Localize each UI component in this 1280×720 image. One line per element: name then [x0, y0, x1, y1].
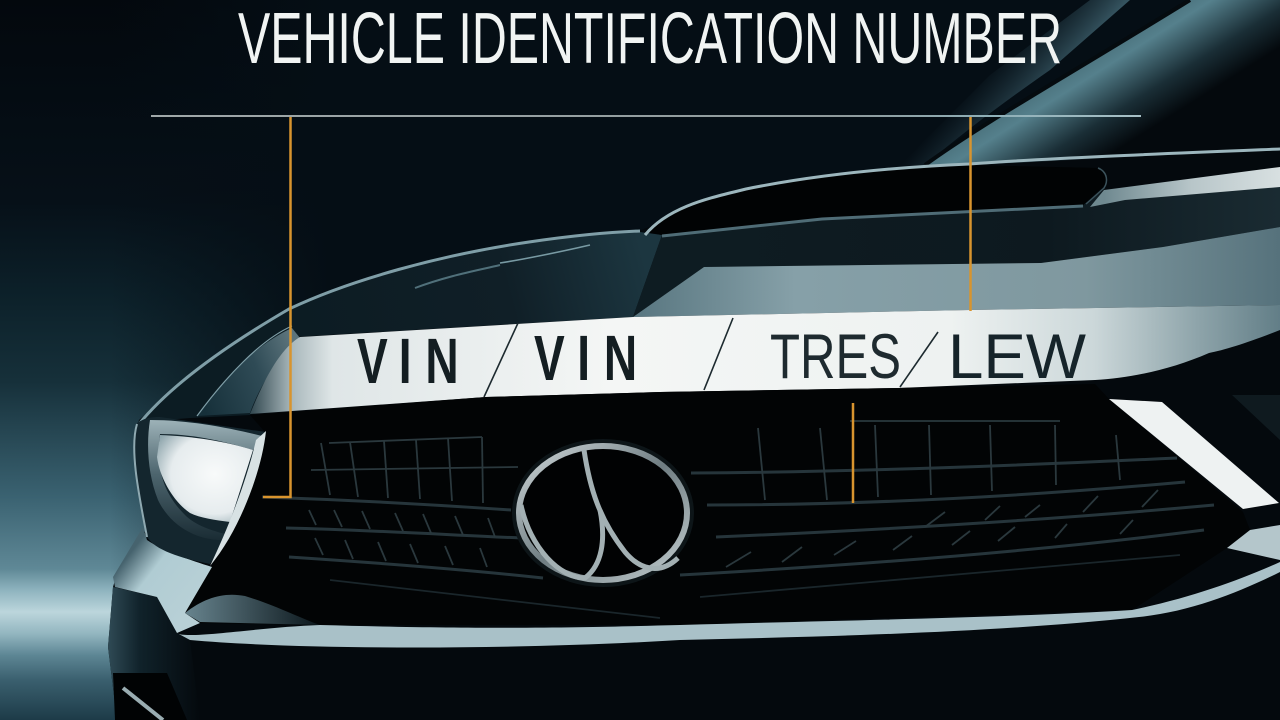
grille — [185, 384, 1250, 625]
headlight — [134, 417, 266, 566]
band label: VIN 1: VIN — [357, 326, 459, 397]
lower cheek and chrome bumper line — [113, 525, 1280, 720]
grille fine bars — [309, 421, 1180, 618]
hood highlights — [139, 231, 640, 424]
dark hood section — [633, 187, 1280, 317]
horizontal rule — [151, 115, 1141, 117]
upper hood stripe — [1090, 167, 1280, 207]
band label: TRES: TRES — [770, 322, 901, 392]
lower air vent — [113, 673, 187, 720]
right bumper highlight — [1227, 525, 1280, 560]
logo emblem — [515, 442, 691, 584]
lower left body shading — [108, 587, 200, 720]
band dividers — [484, 318, 938, 397]
grey hood panel — [633, 227, 1280, 317]
car body — [108, 150, 1280, 720]
grille main bars — [262, 458, 1214, 578]
hood scoop — [645, 149, 1280, 236]
shoulder panel — [197, 328, 300, 416]
lower lip — [185, 595, 320, 625]
right daytime light — [1109, 395, 1280, 509]
band label: VIN 2: VIN — [534, 323, 637, 394]
band label: LEW: LEW — [948, 322, 1087, 392]
white VIN band — [250, 305, 1280, 414]
windshield — [900, 0, 1280, 168]
orange callout lines — [263, 117, 970, 503]
hood left section — [139, 232, 662, 422]
